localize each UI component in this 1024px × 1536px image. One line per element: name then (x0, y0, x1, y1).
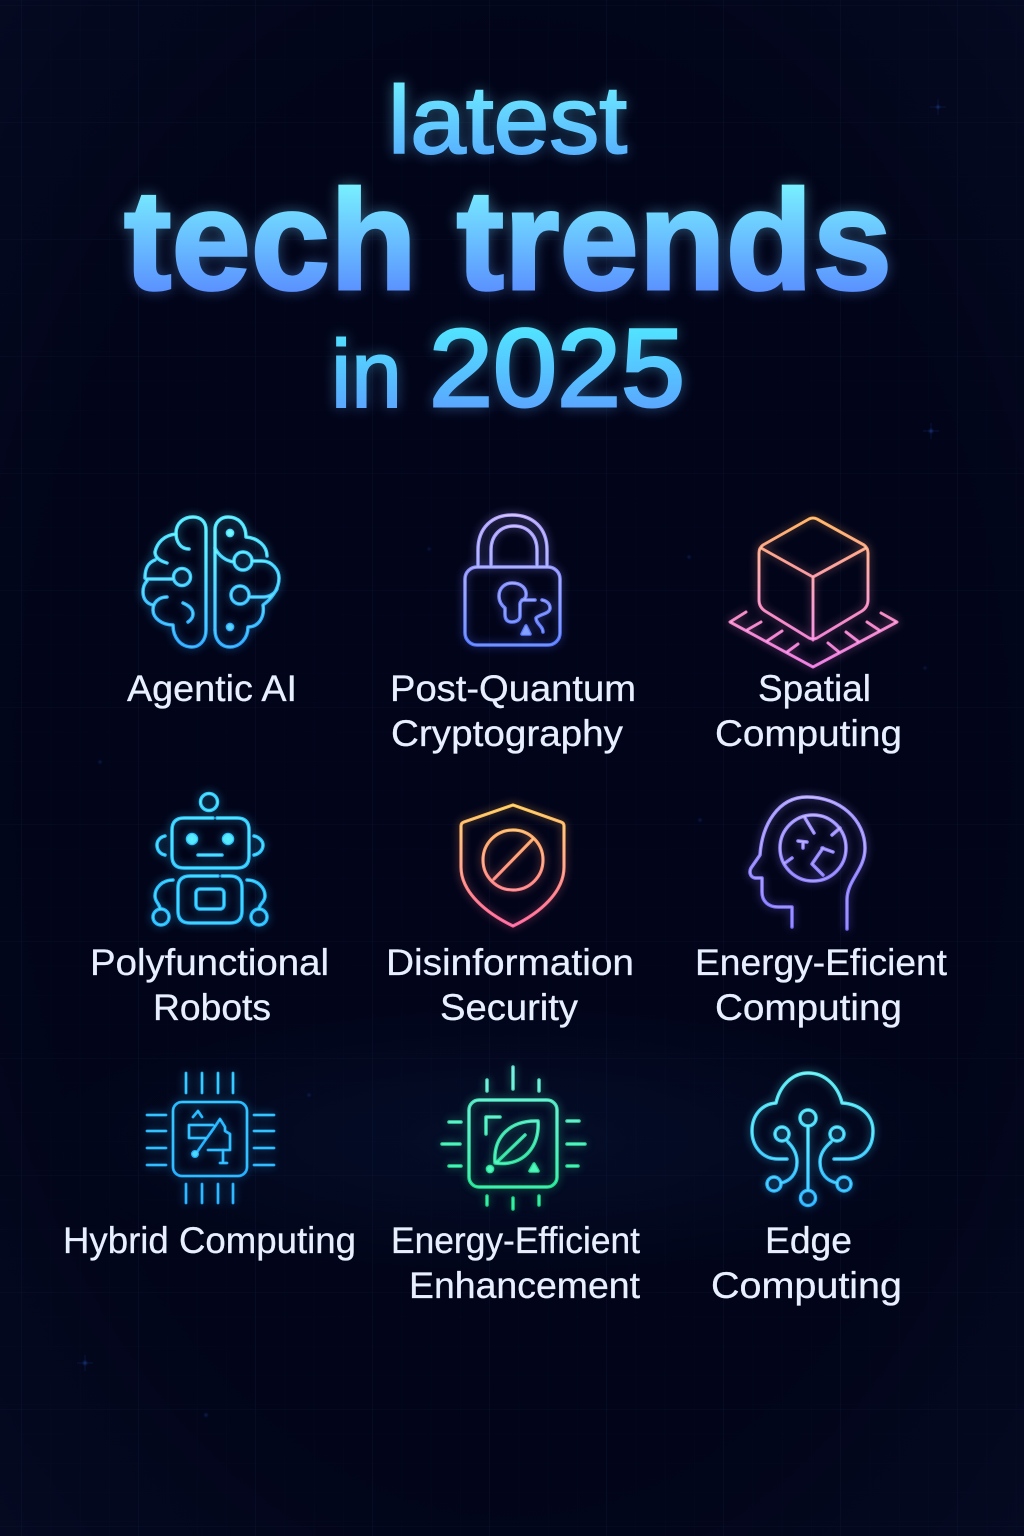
icon: head with clock brain (750, 797, 865, 929)
label: Spatial Computing: Computing (715, 713, 902, 754)
label: Post-Quantum Cryptography: Cryptography (391, 713, 624, 754)
label: Disinformation Security: Disinformation (386, 942, 634, 983)
panel: Hybrid Computing (63, 1073, 356, 1261)
icon: cloud network (752, 1073, 873, 1206)
label: Polyfunctional Robots (90, 942, 329, 1028)
label: Energy-Eficient Computing: Computing (715, 987, 902, 1028)
label: Disinformation Security (386, 942, 634, 1028)
icon: padlock (465, 515, 560, 645)
panel: Spatial Computing (715, 518, 902, 754)
panel: Polyfunctional Robots (90, 794, 329, 1028)
panel: Energy-Eficient Computing (695, 797, 948, 1028)
title (124, 67, 892, 430)
label: Energy-Eficient Computing: Energy-Eficient (695, 942, 948, 983)
label: Hybrid Computing: Hybrid Computing (63, 1220, 356, 1261)
icon: shield with prohibition sign (461, 805, 564, 926)
panel: Disinformation Security (386, 805, 634, 1028)
title line: in: in (331, 321, 402, 428)
label: Edge Computing (711, 1220, 902, 1306)
label: Edge Computing: Computing (711, 1265, 902, 1306)
label: Disinformation Security: Security (440, 987, 579, 1028)
label: Energy-Efficient Enhancement: Energy-Efficient (391, 1220, 641, 1261)
panel: Post-Quantum Cryptography (390, 515, 636, 754)
label: Energy-Efficient Enhancement: Enhancement (409, 1265, 641, 1306)
label: Spatial Computing: Spatial (758, 668, 871, 709)
title line: tech trends: tech trends (124, 161, 892, 320)
label: Polyfunctional Robots: Robots (153, 987, 271, 1028)
label: Agentic AI: Agentic AI (127, 668, 297, 709)
label: Spatial Computing (715, 668, 902, 754)
panel: Energy-Efficient Enhancement (391, 1067, 641, 1306)
label: Energy-Efficient Enhancement (391, 1220, 641, 1306)
title line: latest: latest (388, 67, 627, 174)
label: Post-Quantum Cryptography (390, 668, 636, 754)
icon: isometric cube on grid (730, 518, 897, 667)
label: Polyfunctional Robots: Polyfunctional (90, 942, 329, 983)
icon: brain (143, 517, 279, 647)
label: Energy-Eficient Computing (695, 942, 948, 1028)
panel: Agentic AI (127, 517, 297, 709)
label: Edge Computing: Edge (765, 1220, 852, 1261)
icon: chip with leaf (442, 1067, 585, 1209)
label: Post-Quantum Cryptography: Post-Quantum (390, 668, 636, 709)
title line: 2025: 2025 (429, 307, 685, 430)
icon: robot (153, 794, 267, 925)
icon: circuit chip (147, 1073, 274, 1203)
panel: Edge Computing (711, 1073, 902, 1306)
